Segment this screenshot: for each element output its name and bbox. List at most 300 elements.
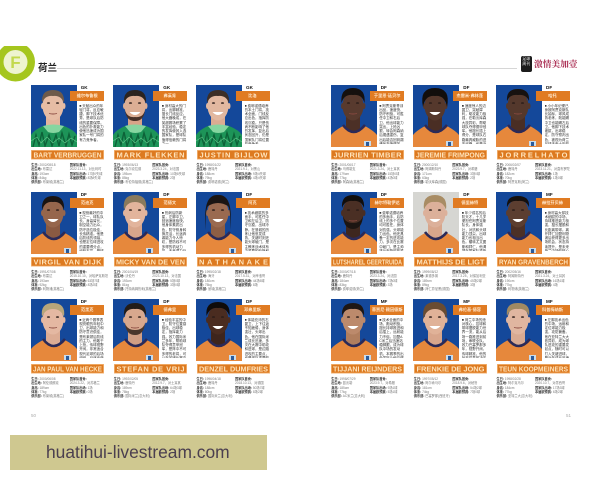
position: DF: [381, 85, 387, 90]
stats left: 俱乐部: 阿贾克斯(荷兰): [496, 180, 529, 184]
name bar: MICKY VAN DE VEN: [116, 257, 185, 266]
stats left: 生日: 2002/05/16: [496, 270, 521, 274]
position: MF: [463, 299, 470, 304]
stats left: 生日: 2001/04/19: [114, 270, 138, 274]
position: MF: [546, 192, 553, 197]
Chinese name ribbon: [453, 198, 487, 208]
stats right: 国家队出场: 63场7球: [70, 279, 99, 283]
photo: [331, 192, 377, 254]
stats left: 俱乐部: 费耶诺德(荷兰): [331, 287, 364, 291]
stats left: 体重: 77kg: [331, 176, 346, 180]
stats right: 本届欧预赛: 3场: [452, 283, 475, 287]
stats right: 2015.10.10，对哈萨克斯坦: [70, 274, 108, 278]
stats right: 国家队出场: 3场0球: [452, 172, 480, 176]
Chinese name ribbon: 杰雷米·弗林蓬: [457, 93, 483, 98]
Chinese name ribbon: 赫尔特勒伊达: [375, 200, 400, 205]
stats left: 体重: 84kg: [31, 176, 46, 180]
stats right: 2017.5.31，对摩洛哥: [235, 274, 265, 278]
stats right: 国家队出场: 9场1球: [370, 386, 398, 390]
stats left: 身高: 184cm: [496, 386, 514, 390]
stats right: 本届欧预赛: 3场: [370, 283, 393, 287]
stats right: 本届欧预赛: 2场: [152, 176, 175, 180]
stats right: 2017.3.25，对保加利亚: [452, 274, 486, 278]
player card: Mark Flekken: [113, 85, 187, 184]
stats left: 俱乐部: 布莱顿(英格兰): [31, 394, 64, 398]
stats right: [535, 270, 565, 287]
stats left: 身高: 189cm: [114, 386, 132, 390]
stats right: 国家队首秀:: [235, 377, 252, 381]
stats right: 国家队出场: 45场2球: [452, 279, 482, 283]
stats left: 体重: 63kg: [414, 176, 429, 180]
stats left: 身高: 185cm: [331, 386, 349, 390]
photo: [413, 192, 459, 254]
stats left: 生日: 2006/02/07: [496, 163, 521, 167]
stats right: [235, 162, 266, 180]
stats left: 身高: 179cm: [331, 172, 349, 176]
stats right: [370, 270, 398, 287]
logo: magazine stamp and title: 周刊: [522, 61, 530, 66]
stats left: 身高: 193cm: [31, 279, 49, 283]
stats right: 国家队出场: 44场5球: [235, 279, 265, 283]
stats right: 国家队出场: 9场4失球: [235, 172, 266, 176]
stats right: 国家队出场: 10场8失球: [152, 172, 185, 176]
stats left: 体重: 80kg: [196, 390, 212, 394]
Chinese name ribbon: 赫拉芬贝赫: [542, 200, 563, 205]
Chinese name ribbon: 范德文: [164, 200, 176, 205]
stats right: 国家队首秀:: [452, 377, 469, 381]
Chinese name ribbon: 科普梅纳斯: [542, 307, 563, 312]
player card: Stefan de Vrij: [113, 299, 187, 399]
Chinese name ribbon: [453, 305, 487, 315]
player card: Jeremie Frimpong: [413, 85, 487, 184]
stats left: 出生地: 阿尔肯马尔: [414, 381, 441, 385]
stats right: [70, 377, 100, 394]
stats left: [414, 162, 447, 184]
stats left: 体重: 78kg: [114, 390, 129, 394]
stats left: 身高: 188cm: [196, 172, 214, 176]
stats left: 生日: 1996/04/18: [196, 377, 221, 381]
stats right: 国家队首秀:: [370, 270, 387, 274]
stats left: 身高: 193cm: [114, 279, 132, 283]
stats right: 本届欧预赛: 2场: [152, 390, 175, 394]
photo: [496, 85, 542, 147]
bio: ■ 天赋出众的年轻门将，反应敏捷，脚下技术优秀，是球队后防线的重要保障。出色的扑救能力使他迅速成为国家队一号门将的有力竞争者。: [79, 104, 104, 142]
stats right: 2021.3.24，对土耳其: [370, 167, 400, 171]
stats left: 体重: 81kg: [114, 283, 129, 287]
page number left: 50: [31, 413, 36, 418]
stats right: 国家队出场: 1场: [70, 386, 93, 390]
stats right: 本届欧预赛: 0场: [70, 390, 93, 394]
name bar: DENZEL DUMFRIES: [198, 364, 268, 373]
stats left: 生日: 1993/06/13: [114, 163, 138, 167]
stats left: 生日: 2001/06/17: [331, 163, 355, 167]
name bar: JUSTIN BIJLOW: [199, 150, 268, 159]
photo: [413, 299, 459, 361]
position: MF: [381, 299, 387, 304]
stats left: 身高: 193cm: [31, 172, 49, 176]
Chinese name ribbon: 哈托: [548, 93, 557, 98]
stats right: 国家队首秀:: [370, 163, 387, 167]
stats right: 国家队出场: 5场0球: [152, 279, 180, 283]
heading: country: 荷兰: [38, 63, 57, 74]
position: DF: [246, 192, 252, 197]
stats left: 出生地: 海牙: [196, 274, 214, 278]
stats right: 国家队出场: 54场2球: [452, 386, 482, 390]
player card: Teun Koopmeiners: [496, 299, 570, 399]
stats right: 2021.9.1，对黑山: [235, 167, 260, 171]
stats left: 体重: 89kg: [414, 283, 429, 287]
Chinese name ribbon: 比洛: [248, 93, 257, 98]
player card: Frenkie de Jong: [413, 299, 487, 399]
logo: magazine stamp and title: 激情美加壹: [534, 58, 577, 70]
stats right: [70, 270, 108, 287]
player card: Micky van de Ven: [113, 192, 187, 291]
name bar: FRENKIE DE JONG: [416, 364, 484, 373]
stats left: [496, 162, 530, 184]
stats left: 俱乐部: 费耶诺德(荷兰): [196, 180, 229, 184]
stats left: 体重: 77kg: [496, 390, 512, 394]
position: GK: [246, 85, 253, 90]
stats right: 国家队首秀:: [152, 163, 169, 167]
stats left: 出生地: 兹沃勒: [331, 381, 352, 385]
stats right: 2018.9.6，对秘鲁: [452, 381, 477, 385]
stats right: 2021.3.24，对土耳其: [535, 274, 565, 278]
stats left: 生日: 1998/02/28: [496, 377, 521, 381]
stats right: 国家队出场: 16场1球: [535, 279, 565, 283]
stats right: 2024.3.22，对苏格兰: [70, 381, 100, 385]
stats left: 俱乐部: 国际米兰(意大利): [114, 394, 150, 398]
stats right: 2023.11.21，对直布罗陀: [535, 167, 570, 171]
stats left: 俱乐部: 巴塞罗那(西班牙): [414, 394, 450, 398]
stats right: [535, 162, 570, 180]
player card: Ryan Gravenberch: [496, 192, 570, 292]
Chinese name ribbon: [453, 91, 487, 101]
stats right: [235, 270, 265, 287]
stats right: 本届欧预赛: 7场0球: [452, 390, 480, 394]
stats right: 国家队首秀:: [452, 163, 469, 167]
stats left: 出生地: 鹿特丹: [496, 167, 518, 171]
stats left: 身高: 189cm: [31, 386, 49, 390]
stats right: 本届欧预赛: 4场0球: [370, 176, 398, 180]
stats left: 俱乐部: 托特纳姆热刺(英格兰): [114, 287, 156, 291]
player card: Matthijs de Ligt: [413, 192, 487, 292]
logo: magazine stamp and title: 足球: [522, 56, 530, 61]
Chinese name ribbon: [370, 305, 404, 315]
stats left: 生日: 2000/12/10: [414, 163, 438, 167]
stats left: [196, 377, 232, 398]
stats right: 2023.3.24，对法国: [370, 274, 397, 278]
player card: Justin Bijlow: [196, 85, 270, 184]
stats left: 体重: 75kg: [196, 283, 212, 287]
photo: [31, 85, 77, 147]
player card: Nathan Ake: [196, 192, 270, 292]
name bar: VIRGIL VAN DIJK: [34, 257, 102, 266]
stats right: 2023.10.13，对法国: [152, 274, 181, 278]
position: DF: [81, 299, 87, 304]
stats right: [452, 162, 480, 180]
page number right: 51: [566, 413, 571, 418]
stats left: 身高: 181cm: [414, 386, 432, 390]
stats right: 国家队首秀:: [152, 377, 169, 381]
stats left: [496, 270, 529, 291]
stats left: [196, 162, 230, 184]
photo: [31, 299, 77, 361]
name bar: MATTHIJS DE LIGT: [416, 257, 485, 266]
Chinese name ribbon: [153, 198, 187, 208]
Chinese name ribbon: [153, 91, 187, 101]
stats left: 体重: 74kg: [414, 390, 429, 394]
stats left: 生日: 1992/02/05: [114, 377, 138, 381]
Chinese name ribbon: [370, 91, 404, 101]
stats left: 体重: 85kg: [114, 176, 129, 180]
stats left: 体重: 92kg: [31, 283, 46, 287]
photo: [113, 85, 159, 147]
stats right: 本届欧预赛: 1场0球: [535, 176, 563, 180]
position: GK: [81, 85, 88, 90]
player card: Bart Verbruggen: [31, 85, 104, 184]
Chinese name ribbon: 弗莱肯: [164, 93, 176, 98]
stats left: [414, 270, 450, 291]
stats left: [196, 270, 226, 291]
stats left: 身高: 190cm: [496, 279, 514, 283]
stats right: 本届欧预赛: 2场: [452, 176, 475, 180]
watermark banner: huatihui-livestream.com: [46, 442, 230, 462]
stats left: [31, 377, 64, 398]
Chinese name ribbon: 德弗里: [164, 307, 176, 312]
logo: section badge F: [0, 46, 35, 82]
Chinese name ribbon: [70, 198, 104, 208]
stats left: 生日: 1999/08/12: [414, 270, 438, 274]
stats right: 国家队出场: 64场3球: [152, 386, 182, 390]
stats right: 本届欧预赛: 6场2球: [535, 390, 563, 394]
stats right: [452, 377, 482, 394]
stats right: [152, 270, 181, 287]
stats right: 国家队首秀:: [452, 270, 469, 274]
player card: Virgil van Dijk: [31, 192, 108, 291]
photo: [331, 85, 377, 147]
stats left: 出生地: 鹿特丹: [331, 274, 352, 278]
stats right: 国家队首秀:: [535, 270, 552, 274]
Chinese name ribbon: 范黑克: [81, 307, 93, 312]
stats right: 本届欧预赛: 5场1球: [370, 390, 398, 394]
stats right: [370, 162, 400, 180]
stats left: 体重: 70kg: [496, 176, 512, 180]
position: DF: [381, 192, 387, 197]
stats right: 国家队出场: 7场0球: [370, 279, 398, 283]
name bar: STEFAN DE VRIJ: [116, 364, 184, 373]
stats left: [31, 162, 64, 184]
position: DF: [163, 299, 169, 304]
stats right: [370, 377, 398, 394]
photo: [113, 299, 159, 361]
photo: [113, 192, 159, 254]
Chinese name ribbon: [370, 198, 404, 208]
stats left: 出生地: 阿姆斯特丹: [496, 274, 524, 278]
position: DF: [163, 192, 169, 197]
player card: Lutsharel Geertruida: [331, 192, 405, 292]
stats left: 体重: 77kg: [31, 390, 46, 394]
stats left: 生日: 1995/02/18: [196, 270, 221, 274]
stats left: 出生地: 沃伦丹: [114, 274, 135, 278]
stats left: 生日: 1998/07/29: [331, 377, 355, 381]
stats left: 出生地: 阿姆斯特丹: [414, 167, 441, 171]
watermark banner: [10, 435, 267, 470]
photo: [196, 85, 242, 147]
stats right: 国家队出场: 15场0球: [370, 172, 399, 176]
stats right: 国家队首秀:: [70, 377, 87, 381]
stats left: 生日: 1998/01/22: [196, 163, 221, 167]
stats left: 出生地: 莱德多普: [414, 274, 438, 278]
stats left: 出生地: 鹿特丹: [196, 381, 218, 385]
stats left: [114, 377, 150, 398]
player card: Jorrel Hato: [496, 85, 570, 184]
name bar: JURRIEN TIMBER: [334, 150, 402, 159]
stats right: 2012.9.7，对土耳其: [152, 381, 181, 385]
position: DF: [246, 299, 252, 304]
stats right: 本届欧预赛: 8场2球: [235, 390, 263, 394]
position: DF: [546, 85, 552, 90]
photo: [31, 192, 77, 254]
stats right: 国家队出场: 17场0失球: [70, 172, 102, 176]
stats left: 身高: 189cm: [414, 279, 432, 283]
stats left: 俱乐部: 利物浦(英格兰): [31, 287, 64, 291]
stats left: 生日: 2000/06/08: [31, 377, 55, 381]
stats left: 身高: 195cm: [114, 172, 132, 176]
Chinese name ribbon: [536, 91, 570, 101]
stats left: [331, 270, 364, 291]
stats left: 体重: 77kg: [331, 390, 346, 394]
stats left: 俱乐部: 曼城(英格兰): [196, 287, 226, 291]
photo: [196, 299, 242, 361]
stats right: 国家队出场: 50场7球: [235, 386, 265, 390]
stats left: 俱乐部: 亚特兰大(意大利): [496, 394, 532, 398]
name bar: J O R R E L H A T O: [499, 150, 567, 159]
stats left: 生日: 2000/07/18: [331, 270, 355, 274]
stats left: 身高: 188cm: [196, 386, 214, 390]
stats right: 国家队首秀:: [535, 377, 552, 381]
stats left: 生日: 2002/08/18: [31, 163, 55, 167]
photo: [331, 299, 377, 361]
logo: magazine stamp and title: [521, 56, 578, 72]
stats right: 本届欧预赛: 4场4失球: [235, 176, 266, 180]
stats right: 2018.10.13，对德国: [235, 381, 264, 385]
stats right: 2020.10.7，对墨西哥: [535, 381, 565, 385]
Chinese name ribbon: [536, 305, 570, 315]
stats left: 体重: 83kg: [331, 283, 346, 287]
Chinese name ribbon: [236, 305, 270, 315]
stats left: 俱乐部: AC米兰(意大利): [331, 394, 365, 398]
stats right: 国家队出场: 17场3球: [535, 386, 565, 390]
name bar: MARK FLEKKEN: [116, 150, 184, 159]
Chinese name ribbon: 蒂贾尼·赖因德斯: [372, 307, 403, 312]
player card: Jan Paul van Hecke: [31, 299, 105, 399]
stats left: 出生地: 克尔克拉德: [114, 167, 141, 171]
header rule: [57, 68, 517, 69]
Chinese name ribbon: 于里恩·廷贝尔: [374, 93, 400, 98]
stats right: 国家队首秀:: [235, 270, 252, 274]
logo: section badge F: F: [10, 53, 21, 72]
stats right: 国家队首秀:: [70, 163, 87, 167]
stats right: 国家队首秀:: [535, 163, 552, 167]
stats left: 出生地: 鹿特丹: [196, 167, 218, 171]
Chinese name ribbon: [153, 305, 187, 315]
stats right: 2023.9.7，对希腊: [452, 167, 477, 171]
stats left: 俱乐部: 勒沃库森(德国): [414, 180, 447, 184]
stats left: [331, 162, 364, 184]
stats left: 生日: 1991/07/08: [31, 270, 55, 274]
stats right: 2023.3.24，对法国: [152, 167, 179, 171]
Chinese name ribbon: 德里赫特: [461, 200, 478, 205]
stats left: 体重: 79kg: [196, 176, 212, 180]
stats left: 出生地: 乌得勒支: [331, 167, 355, 171]
stats right: 2023.9.7，对希腊: [370, 381, 395, 385]
stats left: 俱乐部: 阿森纳(英格兰): [331, 180, 364, 184]
Chinese name ribbon: [70, 91, 104, 101]
stats left: [414, 377, 450, 398]
name bar: TIJJANI REIJNDERS: [333, 364, 402, 373]
stats left: 俱乐部: 布莱顿(英格兰): [31, 180, 64, 184]
player card: Tijjani Reijnders: [331, 299, 405, 399]
stats left: 出生地: 阿尔克马尔: [496, 381, 524, 385]
stats left: 俱乐部: 利物浦(英格兰): [496, 287, 529, 291]
photo: [196, 192, 242, 254]
stats right: 本届欧预赛: 8场: [235, 283, 258, 287]
stats right: 本届欧预赛: 4场: [535, 283, 558, 287]
position: DF: [81, 192, 87, 197]
stats right: 2022.11.13，对比利时: [70, 167, 101, 171]
stats left: 俱乐部: 拜仁慕尼黑(德国): [414, 287, 450, 291]
stats right: [535, 377, 565, 394]
Chinese name ribbon: [236, 198, 270, 208]
stats left: 出生地: 阿伦德朗克: [31, 381, 59, 385]
stats right: 本届欧预赛: 8场8失球: [70, 176, 101, 180]
stats right: 本届欧预赛: 3场0球: [152, 283, 180, 287]
stats left: 体重: 77kg: [496, 283, 512, 287]
position: DF: [463, 192, 469, 197]
photo: [496, 192, 542, 254]
Chinese name ribbon: 邓弗里斯: [244, 307, 261, 312]
photo: [413, 85, 459, 147]
position: DF: [463, 85, 469, 90]
stats left: 出生地: 鹿特丹: [114, 381, 135, 385]
Chinese name ribbon: 维尔布鲁根: [77, 93, 98, 98]
photo: [496, 299, 542, 361]
Chinese name ribbon: 范迪克: [81, 200, 93, 205]
stats left: [114, 162, 153, 184]
player card: Denzel Dumfries: [196, 299, 270, 399]
stats right: [452, 270, 486, 287]
player card: Jurrien Timber: [331, 85, 404, 184]
Chinese name ribbon: 弗伦基·德容: [459, 307, 481, 312]
stats left: 身高: 180cm: [196, 279, 214, 283]
stats right: [70, 162, 102, 180]
stats right: 国家队首秀:: [370, 377, 387, 381]
stats right: 本届欧预赛: 8场2球: [70, 283, 98, 287]
stats left: 俱乐部: 国际米兰(意大利): [196, 394, 232, 398]
Chinese name ribbon: [236, 91, 270, 101]
stats right: 国家队首秀:: [70, 270, 87, 274]
stats right: 国家队首秀:: [152, 270, 169, 274]
stats right: 国家队首秀:: [235, 163, 252, 167]
stats left: 生日: 1997/05/12: [414, 377, 438, 381]
stats left: [114, 270, 156, 291]
stats left: 身高: 182cm: [496, 172, 514, 176]
stats left: 身高: 171cm: [414, 172, 432, 176]
stats left: [31, 270, 64, 291]
stats left: 出生地: 布雷达: [31, 274, 52, 278]
position: GK: [163, 85, 170, 90]
position: MF: [546, 299, 553, 304]
